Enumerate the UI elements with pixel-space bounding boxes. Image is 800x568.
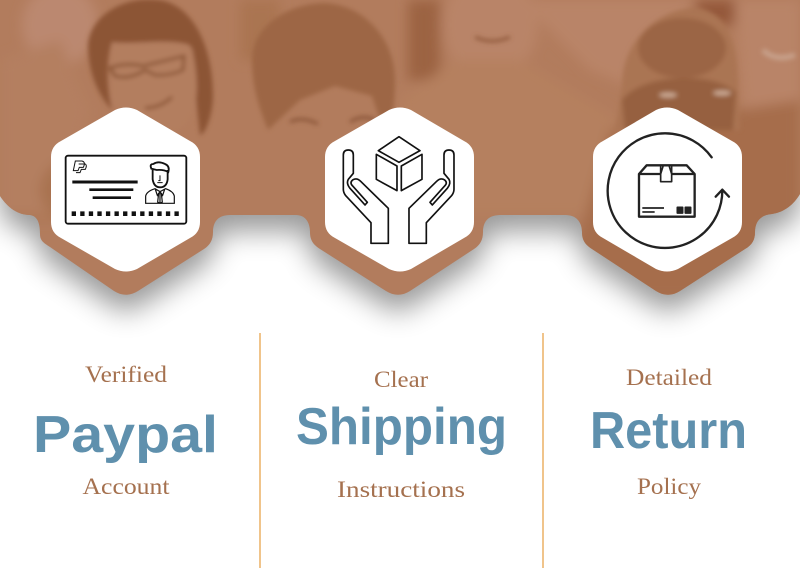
- icon: verified PayPal ID card: [66, 156, 186, 224]
- text block: Clear Shipping Instructions: Instructions: [337, 477, 465, 502]
- text block: Clear Shipping Instructions: Shipping: [296, 398, 507, 456]
- divider lines: [259, 333, 544, 568]
- text block: Verified Paypal Account: Paypal: [33, 406, 218, 464]
- hexagon: return policy: [593, 108, 742, 272]
- text block: Verified Paypal Account: Account: [82, 474, 170, 499]
- hair and face: centre boy: [252, 3, 395, 135]
- text block: Verified Paypal Account: [33, 362, 218, 499]
- hexagon: PayPal card: [51, 108, 200, 272]
- text block: Detailed Return Policy: Detailed: [626, 365, 713, 390]
- hexagon: package in hands: [325, 108, 474, 272]
- text block: Clear Shipping Instructions: Clear: [374, 367, 428, 392]
- text block: Verified Paypal Account: Verified: [85, 362, 168, 387]
- text block: Detailed Return Policy: [590, 365, 747, 499]
- text block: Clear Shipping Instructions: [296, 367, 507, 502]
- smile: centre-right person: [475, 37, 510, 41]
- text block: Detailed Return Policy: Return: [590, 402, 747, 460]
- icon: hands holding box: [343, 137, 454, 243]
- icon: returning package with circular arrow: [608, 133, 729, 248]
- hair and face: left man with glasses: [88, 0, 795, 135]
- photo band: crowd of people in sepia: [0, 0, 800, 300]
- background band shadow: [0, 16, 800, 311]
- face: bald man: [615, 8, 740, 130]
- text block: Detailed Return Policy: Policy: [637, 474, 702, 499]
